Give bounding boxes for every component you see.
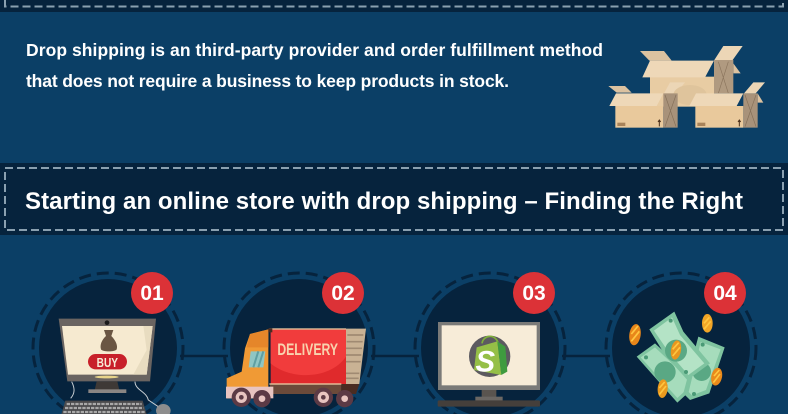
section heading banner: Starting an online store with drop shipping – Finding the Right (25, 188, 743, 215)
step 3: circle (415, 273, 565, 414)
icon: cardboard boxes (608, 46, 765, 128)
badge 04 (704, 272, 746, 314)
icon: computer with buy button: BUY (97, 355, 118, 370)
intro text (26, 40, 603, 91)
step 4: circle (606, 273, 756, 414)
icon: delivery truck (226, 328, 366, 407)
badge 02 (322, 272, 364, 314)
badge 03 (513, 272, 555, 314)
step 2: circle (224, 273, 374, 414)
badge 01: 01 (140, 282, 164, 305)
icon: banknotes and coins (628, 312, 725, 403)
badge 04: 04 (713, 282, 737, 305)
icon: monitor with shopify bag: S (476, 345, 496, 378)
section heading banner (0, 163, 788, 235)
icon: computer with buy button (59, 319, 171, 414)
badge 01 (131, 272, 173, 314)
icon: monitor with shopify bag (438, 322, 540, 407)
intro text: Drop shipping is an third-party provider and order fulfillment method (26, 40, 603, 60)
top dark banner (0, 0, 788, 12)
badge 02: 02 (331, 282, 355, 305)
step 1: circle (33, 273, 183, 414)
connector lines (180, 355, 610, 357)
badge 03: 03 (522, 282, 546, 305)
icon: delivery truck: DELIVERY (277, 340, 338, 359)
intro text: that does not require a business to keep products in stock. (26, 71, 509, 91)
